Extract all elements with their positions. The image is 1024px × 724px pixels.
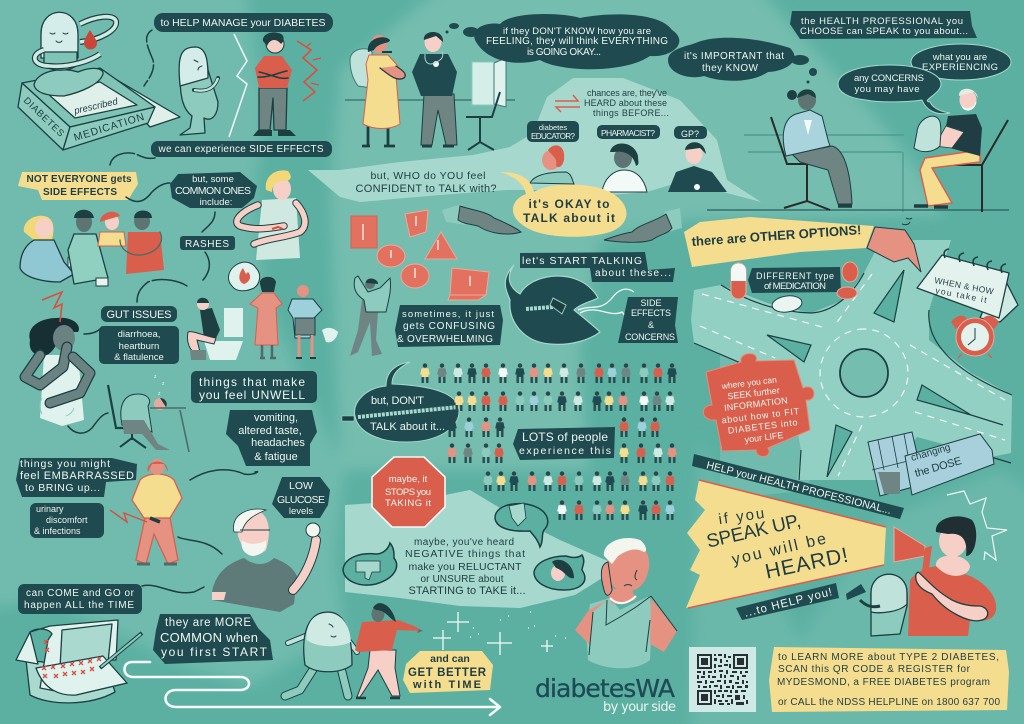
box top [22, 68, 155, 127]
man's trousers [920, 150, 980, 206]
icon: man with arms crossed and pain [253, 32, 321, 136]
centre island [840, 349, 888, 397]
label: diabetes educator: EDUCATOR? [531, 132, 576, 141]
icon: GP [668, 142, 727, 192]
icon: woman listening [575, 538, 677, 668]
label: side effects and concerns: CONCERNS [625, 332, 675, 342]
label: rashes [180, 236, 235, 250]
label: not everyone gets side effects: NOT EVERYONE gets [26, 174, 132, 185]
info box: learn more and helpline: MYDESMOND, a FREE DIABETES program [777, 677, 990, 688]
label: more common when you first start [153, 614, 273, 664]
megaphone beam: if you speak up: if you [717, 505, 765, 528]
icon: small pill with megaphone [846, 574, 907, 636]
speech bubble: any concerns you may have: any CONCERNS [854, 73, 924, 84]
icon: woman in red dress [250, 277, 282, 358]
label: things you might feel embarrassed to bring up: things you might [20, 458, 110, 470]
man's shirt [946, 114, 982, 156]
speech bubble [401, 264, 429, 288]
puzzle piece: where you can seek further information: your LIFE [744, 430, 784, 445]
label: things that make you feel unwell: you feel UNWELL [199, 388, 305, 402]
label: the health professional you choose: CHOOSE can SPEAK to you about... [800, 26, 968, 37]
label: different type of medication: of MEDICATION [764, 281, 826, 292]
box left face [18, 83, 70, 150]
woman's jacket [783, 110, 830, 156]
label: sometimes it just gets confusing and overwhelming [395, 305, 503, 347]
stop sign: maybe it stops you taking it: STOPS you [385, 487, 431, 498]
label: but some common ones include: include: [200, 197, 232, 208]
label: lots of people experience this: experience this [519, 445, 611, 457]
icon: pill box changing the dose [868, 432, 994, 496]
icon: speech bubble opening with zip [505, 265, 634, 344]
woman's legs [792, 146, 852, 204]
connector [110, 153, 155, 165]
icon: walking pill [285, 612, 357, 696]
thought bubble: important that they know: it's IMPORTANT that [684, 51, 784, 62]
pill hoop arms [35, 17, 116, 66]
pill body [41, 12, 78, 58]
text: heard about these: HEARD about these [584, 98, 667, 108]
road dashes [700, 274, 1005, 476]
label: lots of people experience this: LOTS of people [522, 430, 608, 444]
puzzle piece: where you can seek further information: DIABETES into [727, 417, 798, 436]
label: but some common ones include [170, 172, 257, 208]
speech bubble: any concerns you may have [838, 65, 950, 114]
thought bubble: they will think everything is going okay: FEELING, they will think EVERYTHING [486, 36, 668, 47]
label: and can get better with time: with TIME [412, 679, 481, 691]
stop sign: maybe it stops you taking it: maybe, it [389, 474, 428, 485]
label: diarrhoea heartburn flatulence: diarrhoea, [118, 329, 160, 340]
label: the health professional you choose [790, 11, 977, 39]
icon: calendar when and how you take it: WHEN & HOW [934, 275, 994, 296]
man's head [960, 90, 976, 110]
puzzle piece: where you can seek further information: INFORMATION [724, 395, 788, 413]
speech bubble: what you are experiencing [911, 44, 1011, 80]
label: pharmacist [597, 125, 660, 139]
icon: man with rash [237, 170, 305, 260]
label: not everyone gets side effects [18, 172, 138, 200]
text: or unsure about: or UNSURE about [420, 574, 504, 585]
info box: learn more and helpline: to LEARN MORE about TYPE 2 DIABETES, [778, 652, 999, 663]
text: DIABETES: DIABETES [21, 95, 66, 139]
icon: red tablets [837, 262, 858, 299]
road edge lines [694, 273, 1012, 480]
label: but some common ones include: but, some [192, 174, 234, 185]
icon: white shout lines [947, 491, 1007, 560]
label: side effects and concerns [618, 297, 678, 343]
box front face [63, 107, 155, 150]
logo: diabetesWA by your side: by your side [603, 700, 676, 715]
lighter area behind puzzle [720, 340, 810, 500]
icon: man asleep at desk: z [158, 391, 161, 397]
label: urinary discomfort infections: discomfort [46, 515, 88, 525]
thought bubble: they will think everything is going okay [446, 14, 679, 69]
label: vomiting altered taste headaches fatigue: altered taste, [238, 425, 302, 437]
white crack divider [229, 34, 247, 137]
icon: man asleep at desk: z [162, 381, 165, 387]
banner: there are other options [684, 217, 874, 267]
label: to help manage your diabetes: to HELP MANAGE your DIABETES [160, 17, 326, 29]
label: different type of medication [748, 267, 841, 293]
icon: exchange arrows [555, 95, 580, 112]
label: and can get better with time: GET BETTER [408, 667, 487, 679]
text: things before: things BEFORE... [593, 108, 669, 118]
pill on lap [914, 116, 941, 152]
label: diarrhoea heartburn flatulence [99, 326, 179, 364]
label: rashes: RASHES [185, 239, 229, 250]
label: things that make you feel unwell [191, 371, 317, 403]
icon: flatulence puff [322, 328, 338, 342]
megaphone beam: if you speak up [686, 480, 886, 608]
label: things you might feel embarrassed to bring up: feel EMBARRASSED [20, 470, 134, 482]
speech bubble: but don't talk about it: TALK about it... [370, 421, 445, 433]
panel: negative things cone [345, 490, 612, 608]
road surface [691, 240, 1012, 480]
blonde woman [24, 216, 54, 240]
man's chair [944, 120, 1008, 212]
prescribed label [47, 82, 137, 118]
text: negative things that: NEGATIVE things that [405, 548, 525, 560]
doctor [421, 94, 457, 145]
stop sign: maybe it stops you taking it: TAKING it [385, 498, 431, 509]
label: urinary discomfort infections: urinary [36, 504, 64, 514]
icon: walking woman pointing [355, 603, 423, 698]
icon: pharmacist [602, 143, 647, 192]
speech bubble: it's okay to talk about it: TALK about it [523, 211, 615, 225]
label: more common when you first start: COMMON when [160, 630, 258, 645]
label: to help manage your diabetes [154, 13, 333, 32]
speech bubble: but don't talk about it: but, DON'T [371, 395, 424, 407]
label: side effects and concerns: SIDE [640, 298, 662, 308]
icon: hand reaching right [604, 208, 682, 242]
label: let's start talking about these: about these... [595, 268, 671, 279]
icon: overwhelmed person [350, 276, 391, 356]
speech bubble [377, 245, 405, 267]
label: can come and go or happen all the time: can COME and GO or [26, 588, 135, 599]
thought bubble: they will think everything is going okay: if they DON'T KNOW how you are [503, 26, 651, 37]
label: but some common ones include: COMMON ONES [175, 185, 251, 197]
puzzle piece: where you can seek further information: SEEK further [727, 385, 780, 401]
thought bubble: they will think everything is going okay: is GOING OKAY... [527, 47, 601, 58]
megaphone beam: if you speak up: you will be [730, 531, 828, 569]
label: things that make you feel unwell: things that make [199, 375, 305, 389]
floor line [707, 209, 1009, 211]
label: diabetes educator: diabetes [539, 123, 567, 132]
man in red [134, 212, 150, 230]
crossed legs [34, 68, 103, 96]
text: MEDICATION: MEDICATION [72, 111, 146, 144]
icon: pill box changing the dose: the DOSE [914, 455, 963, 480]
text: prescribed: prescribed [72, 96, 120, 117]
megaphone beam: if you speak up: SPEAK UP, [705, 511, 803, 553]
stop sign: maybe it stops you taking it [372, 457, 445, 527]
panel: who do you feel confident to talk with [308, 78, 761, 202]
orange-haired woman [105, 214, 119, 230]
label: sometimes it just gets confusing and overwhelming: & OVERWHELMING [397, 334, 493, 345]
speech bubble: any concerns you may have: you may have [854, 84, 920, 95]
leaflet drawer [117, 80, 180, 127]
pill face [50, 33, 68, 42]
text: make you reluctant: make you RELUCTANT [408, 561, 522, 573]
speech bubble: medication leaflet [495, 503, 548, 547]
icon: educator [530, 145, 574, 184]
info box: learn more and helpline [769, 647, 1009, 712]
text: but who do you feel: but, WHO do YOU feel [370, 170, 486, 182]
label: and can get better with time [403, 651, 493, 693]
label: vomiting altered taste headaches fatigue: vomiting, [254, 412, 298, 424]
icon: man asleep at desk: z [154, 374, 157, 380]
icons: red warning symbols [351, 210, 489, 300]
icon: woman holding stomach [25, 292, 90, 426]
icon: calendar with crosses [16, 620, 142, 703]
label: different type of medication: DIFFERENT type [756, 271, 834, 281]
label: side effects and concerns: & [648, 320, 654, 330]
label: diabetes educator [527, 121, 579, 142]
label: vomiting altered taste headaches fatigue: headaches [251, 437, 305, 449]
woman's head [798, 90, 816, 110]
label: pharmacist: PHARMACIST? [601, 128, 655, 138]
icon: woman with crossed legs [110, 459, 182, 564]
label: can come and go or happen all the time: happen ALL the TIME [24, 600, 134, 611]
crowd of small people [420, 363, 677, 520]
label: vomiting altered taste headaches fatigue: & fatigue [254, 451, 298, 463]
banner: there are other options: there are OTHER OPTIONS! [691, 222, 862, 249]
label: urinary discomfort infections [30, 503, 104, 538]
icon: pill box changing the dose: changing [910, 442, 952, 464]
office chair [466, 92, 500, 150]
speech bubble: thumbs down [343, 543, 397, 585]
label: let's start talking about these [520, 252, 675, 282]
label: diarrhoea heartburn flatulence: & flatulence [114, 352, 164, 363]
roads and roundabout [691, 240, 1012, 500]
thought bubble: important that they know: they KNOW [702, 63, 759, 74]
label: vomiting altered taste headaches fatigue [226, 410, 317, 466]
floor line [345, 99, 515, 101]
puzzle piece: where you can seek further information: about how to FIT [721, 406, 800, 425]
connector [142, 585, 204, 593]
paper [405, 210, 428, 237]
label: gut issues [101, 306, 177, 322]
pain zigzag [297, 41, 317, 101]
speech bubble: it's okay to talk about it: it's OKAY to [528, 197, 610, 211]
icon: man asleep at desk [108, 374, 189, 452]
label: urinary discomfort infections: & infections [34, 526, 81, 536]
text: confident to talk with: CONFIDENT to TALK with? [356, 183, 496, 195]
label: help your health professional: HELP your HEALTH PROFESSIONAL... [705, 459, 892, 517]
table lines [744, 135, 904, 212]
thought bubble: important that they know [668, 38, 817, 84]
icon: hand reaching left [442, 204, 521, 234]
icon: woman at door with doctor [345, 32, 515, 150]
label: lots of people experience this [513, 427, 615, 460]
woman's chair [771, 117, 830, 210]
connector [126, 183, 170, 201]
label: more common when you first start: they are MORE [165, 617, 251, 629]
traffic islands [874, 270, 904, 322]
label: sometimes it just gets confusing and overwhelming: sometimes, it just [402, 309, 494, 320]
man with glasses [76, 212, 92, 232]
label: things you might feel embarrassed to bring up [16, 458, 137, 497]
door [472, 62, 494, 105]
label: diarrhoea heartburn flatulence: heartburn [119, 341, 159, 352]
icon: alarm clock [952, 316, 998, 358]
info box: learn more and helpline: or CALL the NDSS HELPLINE on 1800 637 700 [778, 697, 1000, 708]
label: low glucose levels [272, 477, 330, 518]
label: let's start talking about these: let's START TALKING [522, 255, 642, 267]
connector [178, 537, 222, 554]
blood drop [84, 30, 97, 50]
label: can come and go or happen all the time [18, 584, 142, 614]
label: not everyone gets side effects: SIDE EFFECTS [43, 187, 117, 198]
icon: diabetes medication box with pill [18, 12, 180, 150]
info box: learn more and helpline: SCAN this QR CODE & REGISTER for [778, 664, 971, 675]
puzzle piece: where you can seek further information: where you can [720, 374, 778, 391]
icon: bearded man with glasses [212, 509, 320, 612]
label: low glucose levels: GLUCOSE [277, 494, 325, 506]
megaphone beam: if you speak up: HEARD! [763, 544, 850, 584]
QR code [689, 647, 756, 712]
pill behind woman [350, 49, 372, 88]
icon: group of four people [20, 210, 164, 286]
icon: seated woman and man with pill at table [707, 89, 1009, 212]
label: low glucose levels: LOW [289, 480, 313, 492]
label: we can experience side effects: we can experience SIDE EFFECTS [158, 144, 324, 155]
icon: pointing hand [867, 218, 921, 272]
label: GP [674, 126, 707, 139]
logo: diabetesWA by your side: diabetesWA [535, 674, 675, 703]
icon: man on toilet [187, 298, 243, 360]
book [351, 216, 377, 248]
icon: flame thought bubble [229, 262, 260, 291]
text: starting to take it: STARTING to TAKE it... [408, 585, 526, 597]
speech bubble: it's okay to talk about it [500, 172, 626, 237]
speech bubble: but don't talk about it [342, 362, 459, 442]
label: we can experience side effects [151, 141, 332, 157]
speech bubble: what you are experiencing: what you are [932, 52, 987, 63]
icon: capsule [731, 263, 746, 299]
icon: worried pill kneeling [179, 47, 218, 135]
label: GP: GP? [681, 129, 699, 139]
text: chances are: chances are, they've [587, 88, 667, 98]
label: to help you: ...to HELP you! [743, 586, 833, 620]
label: side effects and concerns: EFFECTS [631, 308, 671, 318]
label: sometimes it just gets confusing and overwhelming: gets CONFUSING [403, 321, 495, 332]
label: things you might feel embarrassed to bring up: to BRING up... [25, 482, 100, 494]
laptop [448, 268, 489, 300]
white journey arrow [124, 662, 500, 715]
icon: man holding stomach [288, 285, 322, 358]
sparkles [433, 612, 566, 655]
icon: calendar when and how you take it [917, 249, 1018, 322]
man's arm [934, 126, 964, 148]
label: and can get better with time: and can [430, 653, 470, 665]
label: gut issues: GUT ISSUES [106, 309, 172, 321]
woman in yellow gown [362, 126, 395, 146]
icon: man with megaphone [894, 516, 996, 636]
dashed connector [144, 30, 154, 86]
speech bubble: woman gossiping [534, 555, 585, 590]
triangle [425, 232, 457, 259]
icon: white tablet [771, 294, 803, 314]
icon: calendar when and how you take it: you take it [935, 285, 988, 305]
label: low glucose levels: levels [289, 506, 313, 517]
label: the health professional you choose: the HEALTH PROFESSIONAL you [801, 16, 963, 27]
puzzle piece: where you can seek further information [703, 354, 814, 457]
speech bubble: what you are experiencing: EXPERIENCING [922, 62, 998, 73]
label: more common when you first start: you first START [161, 645, 268, 659]
text: maybe you've heard: maybe, you've heard [414, 537, 514, 548]
